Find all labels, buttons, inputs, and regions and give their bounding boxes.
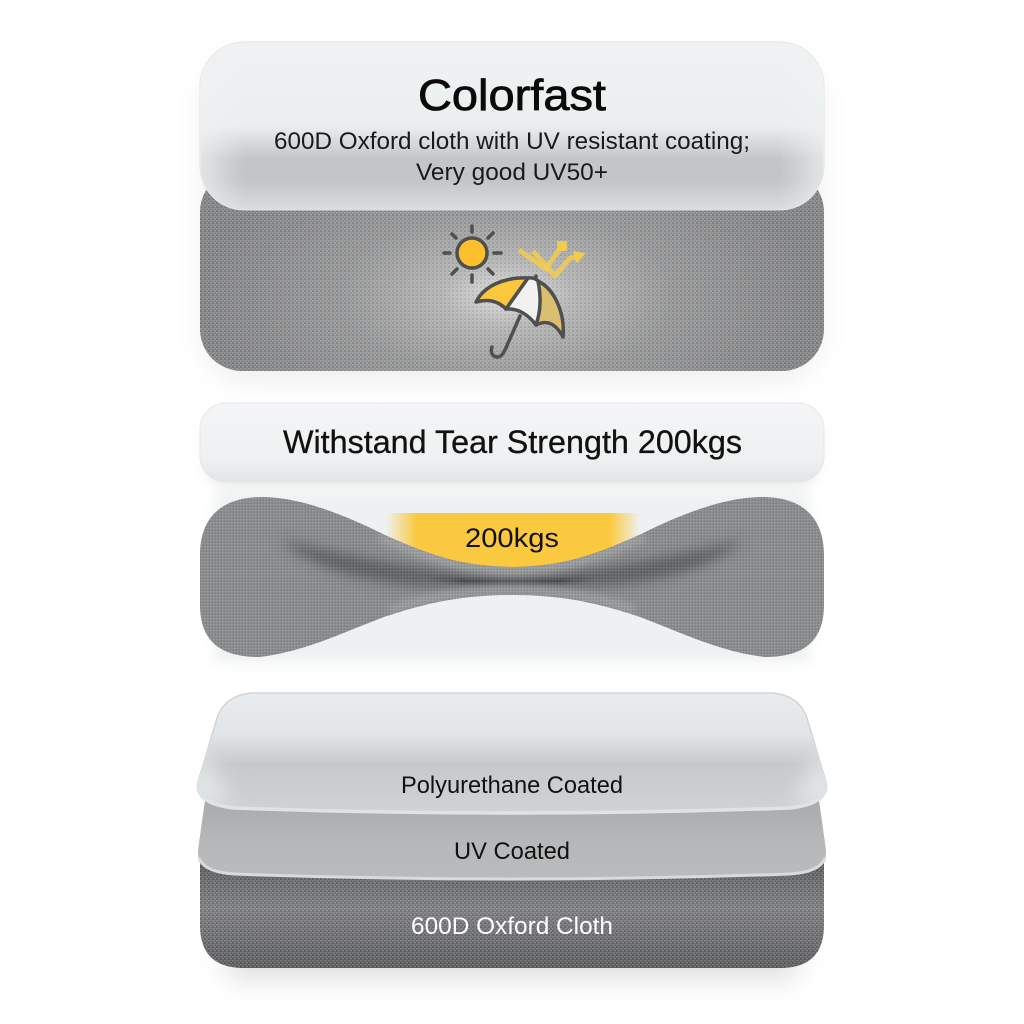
tear strength heading bar: Withstand Tear Strength 200kgs (283, 424, 742, 460)
icon: sun (444, 226, 501, 282)
heading: colorfast: Colorfast (418, 71, 606, 120)
stretched fabric (200, 497, 824, 657)
title card (200, 42, 824, 210)
description text: 600D Oxford cloth with UV resistant coating; (274, 128, 750, 155)
tear strength heading bar (200, 403, 824, 487)
icon: umbrella (476, 276, 563, 357)
description text (274, 128, 750, 186)
layer: UV coated (198, 800, 826, 880)
description text: Very good UV50+ (416, 159, 608, 186)
panel: colorfast (200, 42, 824, 380)
fabric swatch with UV icons (200, 170, 824, 371)
layer: polyurethane coated (180, 693, 844, 813)
yellow 200kgs load band (386, 513, 640, 581)
stretched fabric: 200kgs (465, 523, 559, 553)
panel: tear strength (200, 403, 824, 662)
panel: material layers (180, 693, 844, 976)
layer: 600D oxford cloth: 600D Oxford Cloth (411, 913, 613, 940)
layer: 600D oxford cloth (200, 860, 824, 968)
layer: polyurethane coated: Polyurethane Coated (401, 772, 623, 799)
layer: UV coated: UV Coated (454, 838, 570, 865)
icon: yellow uv arrows (519, 242, 584, 276)
